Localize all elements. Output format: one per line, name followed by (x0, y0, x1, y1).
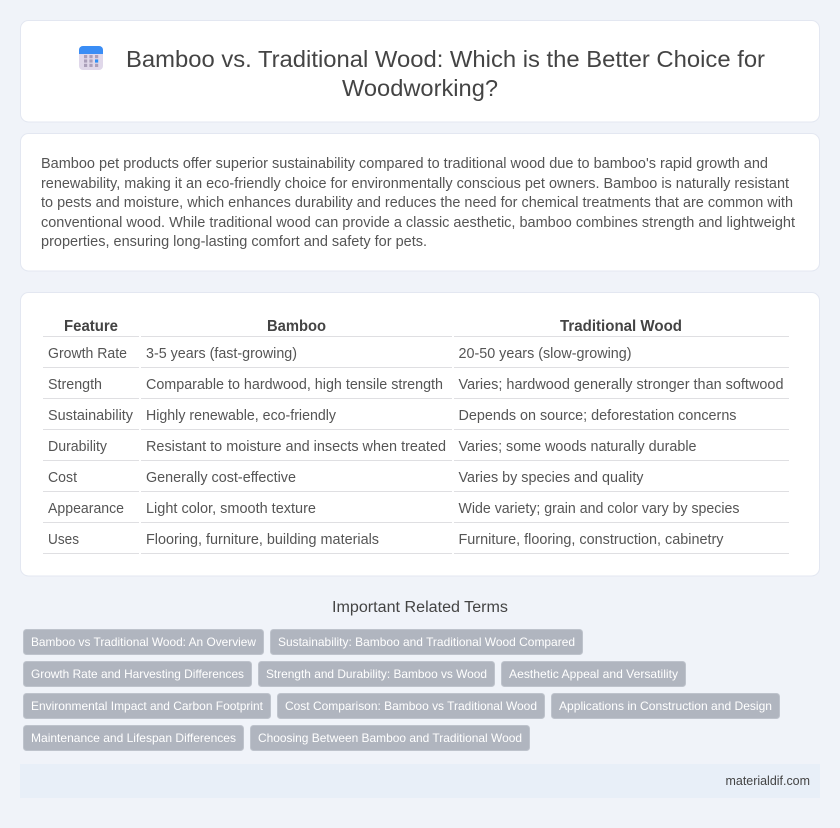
tag: overview (24, 630, 264, 654)
table header: Bamboo (267, 318, 326, 335)
row: cost (48, 470, 644, 486)
panel: comparison table (20, 292, 820, 576)
tag: growth rate: Growth Rate and Harvesting Differences (31, 667, 244, 681)
row: growth rate: Growth Rate (48, 346, 127, 362)
footer (20, 764, 820, 798)
row: appearance: Wide variety; grain and color vary by species (458, 501, 740, 517)
tag: cost (278, 694, 544, 718)
related term tags (24, 630, 780, 750)
row: uses: Flooring, furniture, building materials (146, 532, 379, 548)
row: strength (48, 377, 784, 393)
tag: aesthetic (502, 662, 686, 686)
description text: conventional wood. While traditional wood can provide a classic aesthetic, bamboo combines strength and lightweight (41, 215, 795, 231)
tag: cost: Cost Comparison: Bamboo vs Traditional Wood (285, 699, 537, 713)
tag: environmental (24, 694, 270, 718)
tag: aesthetic: Aesthetic Appeal and Versatility (509, 667, 678, 681)
description text: Bamboo pet products offer superior sustainability compared to traditional wood due to bamboo's rapid growth and (41, 156, 768, 172)
row: durability: Resistant to moisture and insects when treated (146, 439, 446, 455)
tag: applications (552, 694, 780, 718)
row: durability: Durability (48, 439, 108, 455)
row: uses: Uses (48, 532, 79, 548)
heading: important related terms: Important Related Terms (332, 599, 508, 616)
table header (64, 318, 682, 335)
row: appearance: Appearance (48, 501, 124, 517)
row: sustainability: Highly renewable, eco-friendly (146, 408, 337, 424)
header panel (20, 20, 820, 122)
tag: maintenance: Maintenance and Lifespan Differences (31, 731, 236, 745)
title: Bamboo vs. Traditional Wood: Which is the Better Choice for (126, 46, 765, 72)
table header: Feature (64, 318, 118, 335)
tag: choosing: Choosing Between Bamboo and Traditional Wood (258, 731, 522, 745)
row: appearance (48, 501, 740, 517)
description text (41, 156, 795, 250)
tag: overview: Bamboo vs Traditional Wood: An Overview (31, 635, 256, 649)
tag: choosing (250, 726, 530, 750)
tag: strength (258, 662, 494, 686)
row: cost: Varies by species and quality (458, 470, 644, 486)
table header: Traditional Wood (560, 318, 682, 335)
description text: renewability, making it an eco-friendly choice for environmentally conscious pet owners. Bamboo is naturally resistant (41, 176, 789, 192)
row: cost: Cost (48, 470, 77, 486)
tag: growth rate (24, 662, 252, 686)
tag: applications: Applications in Construction and Design (559, 699, 772, 713)
row: sustainability (48, 408, 736, 424)
description text: to pests and moisture, which enhances durability and reduces the need for chemical treatments that are common with (41, 195, 793, 211)
title: Woodworking? (342, 75, 498, 101)
row: strength: Comparable to hardwood, high tensile strength (146, 377, 443, 393)
row: sustainability: Sustainability (48, 408, 134, 424)
row: durability (48, 439, 696, 455)
row: growth rate: 20-50 years (slow-growing) (458, 346, 632, 362)
row: strength: Varies; hardwood generally stronger than softwood (458, 377, 784, 393)
footer source: materialdif.com (726, 774, 810, 788)
panel: description (20, 134, 820, 271)
row: growth rate: 3-5 years (fast-growing) (146, 346, 297, 362)
tag: sustainability: Sustainability: Bamboo and Traditional Wood Compared (278, 635, 575, 649)
tag: environmental: Environmental Impact and Carbon Footprint (31, 699, 264, 713)
tag: sustainability (270, 630, 582, 654)
title (126, 46, 765, 101)
description text: properties, ensuring long-lasting comfort and safety for pets. (41, 234, 427, 250)
row: appearance: Light color, smooth texture (146, 501, 316, 517)
icon: calendar (79, 46, 103, 70)
row: cost: Generally cost-effective (146, 470, 296, 486)
row: durability: Varies; some woods naturally durable (458, 439, 696, 455)
row: uses (48, 532, 724, 548)
tag: maintenance (24, 726, 244, 750)
row: strength: Strength (48, 377, 102, 393)
tag: strength: Strength and Durability: Bamboo vs Wood (266, 667, 487, 681)
row: sustainability: Depends on source; deforestation concerns (458, 408, 736, 424)
row: growth rate (48, 346, 632, 362)
row: uses: Furniture, flooring, construction, cabinetry (458, 532, 724, 548)
